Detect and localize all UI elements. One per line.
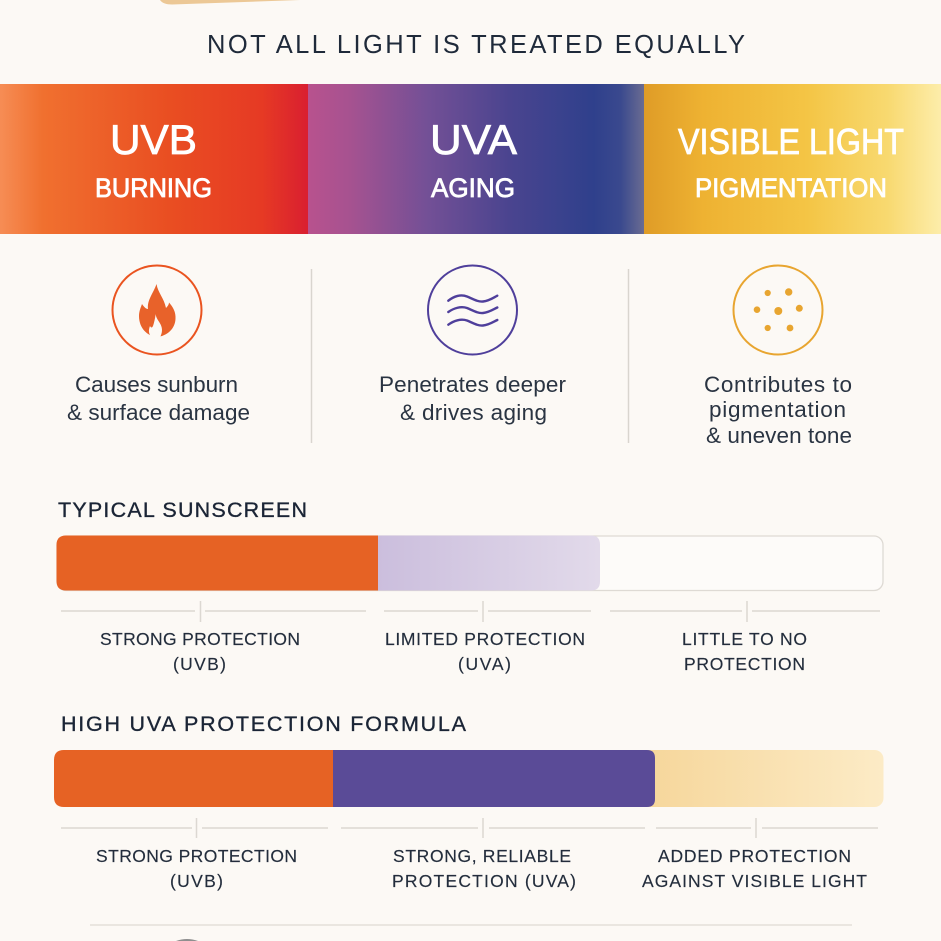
label: strong protection UVB xyxy=(100,629,300,674)
panel: UVA effect xyxy=(379,266,566,425)
band segment: UVB: BURNING xyxy=(95,173,212,203)
text: UVA effect xyxy=(379,372,566,425)
text: visible light effect xyxy=(704,372,852,448)
band segment: UVA: UVA xyxy=(430,116,517,163)
label: strong protection UVB: (UVB) xyxy=(170,871,223,891)
label: strong protection UVB: STRONG PROTECTION xyxy=(100,629,300,649)
bar chart: high UVA protection formula xyxy=(54,750,884,807)
panel: spectrum band xyxy=(0,84,941,234)
panel: visible light effect xyxy=(704,266,852,448)
label: limited protection UVA: (UVA) xyxy=(458,654,511,674)
label: strong reliable protection UVA: PROTECTION (UVA) xyxy=(392,871,576,891)
label: added protection against visible light: AGAINST VISIBLE LIGHT xyxy=(642,871,867,891)
band segment: visible light xyxy=(644,84,941,234)
scale: typical sunscreen xyxy=(61,601,880,622)
text: visible light effect: Contributes to xyxy=(704,372,852,397)
text: UVA effect: Penetrates deeper xyxy=(379,372,566,397)
heading: typical sunscreen: TYPICAL SUNSCREEN xyxy=(58,498,307,522)
panel: UVB effect xyxy=(67,266,250,425)
title: NOT ALL LIGHT IS TREATED EQUALLY xyxy=(207,31,745,59)
band segment: UVA: AGING xyxy=(431,173,515,203)
icon: waves xyxy=(428,266,517,354)
icon: flame xyxy=(112,266,202,354)
heading: high UVA protection formula: HIGH UVA PROTECTION FORMULA xyxy=(61,712,467,736)
band segment: visible light: PIGMENTATION xyxy=(695,173,887,203)
cropped icon at bottom xyxy=(176,939,198,941)
band segment: UVA xyxy=(308,84,644,234)
text: UVB effect xyxy=(67,372,250,425)
label: little to no protection: PROTECTION xyxy=(684,654,805,674)
label: added protection against visible light: ADDED PROTECTION xyxy=(658,846,851,866)
band segment: visible light: VISIBLE LIGHT xyxy=(678,121,904,162)
label: strong protection UVB: STRONG PROTECTION xyxy=(96,846,297,866)
label: limited protection UVA: LIMITED PROTECTION xyxy=(385,629,585,649)
icon: pigmentation dots xyxy=(734,266,822,354)
text: UVA effect: & drives aging xyxy=(400,400,547,425)
text: visible light effect: & uneven tone xyxy=(706,423,852,448)
band segment: UVB: UVB xyxy=(110,116,197,163)
label: strong reliable protection UVA xyxy=(392,846,576,891)
cropped tan shape at top xyxy=(160,0,300,4)
text: visible light effect: pigmentation xyxy=(709,397,846,422)
label: little to no protection: LITTLE TO NO xyxy=(682,629,807,649)
label: strong reliable protection UVA: STRONG, RELIABLE xyxy=(393,846,571,866)
scale: high UVA protection formula xyxy=(61,818,878,838)
label: little to no protection xyxy=(682,629,807,674)
bar chart: typical sunscreen xyxy=(56,536,883,590)
text: UVB effect: Causes sunburn xyxy=(75,372,238,397)
label: strong protection UVB xyxy=(96,846,297,891)
text: UVB effect: & surface damage xyxy=(67,400,250,425)
band segment: UVB xyxy=(0,84,308,234)
label: limited protection UVA xyxy=(385,629,585,674)
label: added protection against visible light xyxy=(642,846,867,891)
label: strong protection UVB: (UVB) xyxy=(173,654,226,674)
